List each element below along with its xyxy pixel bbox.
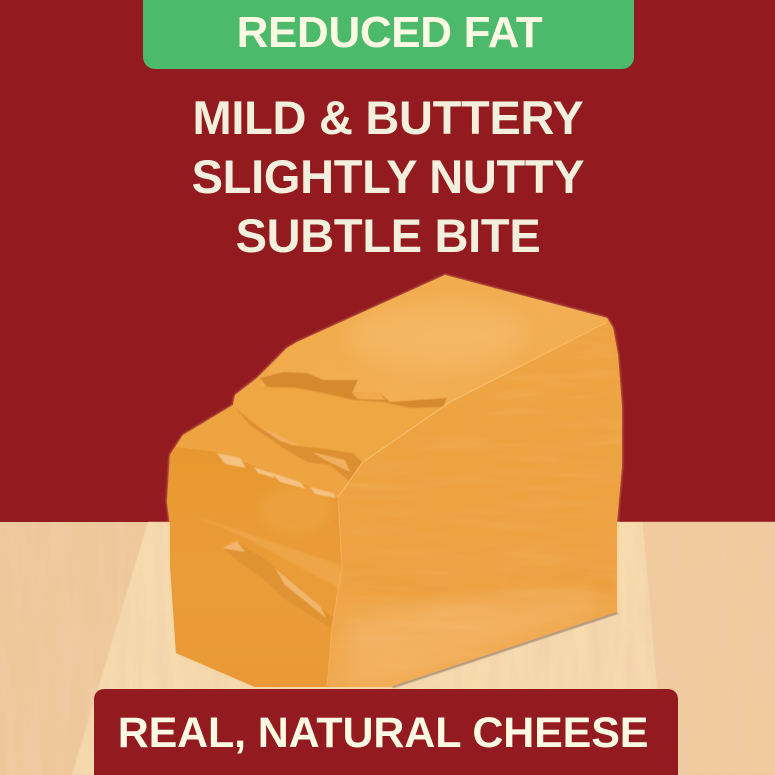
warm patch on left face (264, 490, 326, 528)
right face streak texture (349, 441, 621, 594)
bottom red banner (94, 689, 678, 775)
upper fracture (260, 372, 447, 408)
cheese shadow on board (390, 611, 618, 688)
pale area lower right face (345, 590, 600, 685)
cheese block (160, 270, 630, 700)
crease shading on right face (340, 560, 617, 615)
cheese mid ledge (261, 385, 440, 462)
flavor description: SLIGHTLY NUTTY (192, 150, 584, 203)
vertical edge (327, 497, 342, 688)
ridge highlight (338, 322, 607, 497)
cheese glow (167, 275, 622, 687)
bottom banner text: REAL, NATURAL CHEESE (118, 709, 648, 757)
cheese right face (328, 318, 622, 687)
flavor description: MILD & BUTTERY (193, 91, 583, 144)
cheese left face (167, 447, 341, 687)
second fracture (235, 408, 362, 482)
background and cheese illustration (0, 273, 775, 775)
right plank (643, 522, 775, 775)
flavor description: SUBTLE BITE (236, 209, 540, 262)
pale band on left face (208, 520, 340, 588)
pale highlights on left face top edge (217, 453, 336, 498)
lower fracture (222, 542, 333, 628)
center plank (72, 522, 665, 775)
flavor description (192, 91, 584, 262)
upper fracture highlights (352, 392, 385, 400)
cheese top face (260, 275, 608, 405)
wood grain (0, 522, 775, 775)
pale area top face (345, 303, 525, 367)
second fracture highlights (262, 428, 350, 472)
banner text: REDUCED FAT (237, 8, 542, 57)
cheese base fill (160, 270, 630, 695)
lower fracture highlights (222, 541, 326, 618)
wooden surface (0, 522, 775, 775)
top green banner (143, 0, 634, 69)
cheese left ledge (176, 405, 233, 446)
